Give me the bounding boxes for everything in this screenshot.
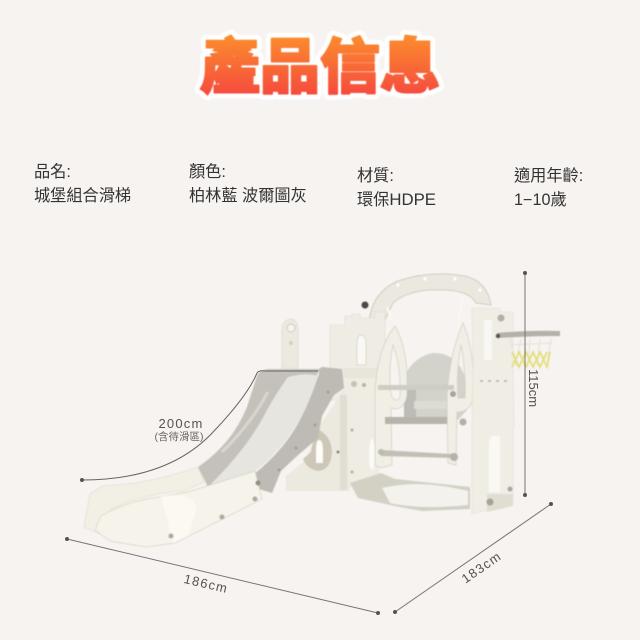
arch [362, 274, 491, 322]
slide left end [84, 467, 204, 534]
dimension: slide length 200cm: (含待滑區) [154, 430, 204, 443]
spec: product name [34, 162, 131, 205]
spec: age: 適用年齡: [514, 167, 583, 185]
spec: age [514, 166, 583, 209]
dimension: length 186cm: 186cm [182, 571, 230, 596]
dimension: slide length 200cm: 200cm [158, 416, 204, 431]
spec: material: 材質: [357, 167, 394, 185]
dimension: height 115cm: 115cm [526, 369, 541, 407]
slide grey wall [198, 369, 320, 487]
base block [286, 388, 350, 491]
spec: colour: 柏林藍 波爾圖灰 [189, 187, 307, 205]
dimension: slide length 200cm [80, 371, 318, 482]
left castle [330, 312, 385, 487]
slide bottom [95, 471, 262, 547]
swing seat [404, 353, 467, 420]
title: 產品信息 [200, 34, 440, 101]
slide bed [208, 374, 319, 487]
slide side panel [253, 367, 344, 493]
spec: product name: 品名: [34, 163, 71, 181]
basketball hoop [496, 331, 560, 367]
base ring [350, 473, 470, 511]
post behind slide [282, 319, 298, 368]
swing bars [378, 385, 466, 461]
spec: product name: 城堡組合滑梯 [34, 187, 131, 205]
right tower [472, 308, 514, 514]
spec: material: 環保HDPE [357, 190, 436, 209]
spec: age: 1−10歲 [514, 191, 567, 209]
swing frames [375, 323, 474, 468]
dimension: length 186cm [65, 537, 380, 615]
dimension: width 183cm: 183cm [459, 548, 504, 586]
spec: material [357, 166, 436, 209]
spec: colour [189, 162, 307, 205]
slide [84, 367, 344, 547]
dimension: width 183cm [393, 502, 553, 614]
slide inner stripe [222, 392, 268, 452]
title: 產品信息 [200, 34, 440, 101]
spec: colour: 顏色: [189, 163, 226, 181]
dimension: height 115cm [523, 271, 541, 497]
